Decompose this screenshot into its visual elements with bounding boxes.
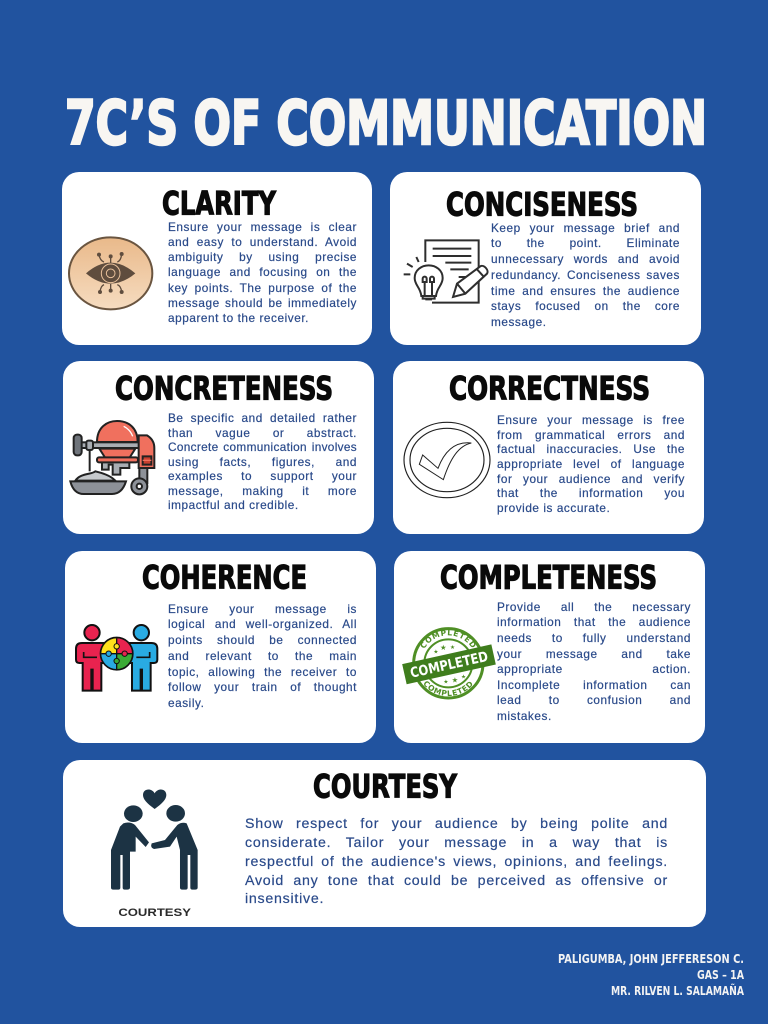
text: conciseness: Keep your message brief and [491,221,680,235]
icon: completed stamp: ★ [461,673,466,680]
text: concreteness: than vague or abstract. [168,426,357,440]
text: correctness [497,413,685,515]
text: clarity: and easy to understand. Avoid [168,235,357,249]
icon: two people shaking hands with heart: COURTESY [118,907,192,919]
text: concreteness: Concrete communication involves [168,440,357,454]
text: correctness: provide is accurate. [497,501,610,515]
text: clarity: key points. The purpose of the [168,281,357,295]
text: completeness: appropriate action. [497,662,691,676]
panel: clarity [62,172,372,345]
text: completeness: information that the audience [497,615,691,629]
text: courtesy: insensitive. [245,891,324,907]
panel: concreteness [63,361,374,534]
text: conciseness: message. [491,315,547,329]
icon: completed stamp [402,627,496,700]
icon: completed stamp: ★ [450,644,455,651]
panel: courtesy [63,760,706,927]
text: courtesy: Avoid any tone that could be perceived as offensive or [245,873,668,889]
icon: document, bulb and pencil [404,239,489,304]
panel: coherence [65,551,376,743]
icon: completed stamp: COMPLETED [424,681,472,696]
text: conciseness: redundancy. Conciseness saves [491,268,680,282]
text: correctness: Ensure your message is free [497,413,685,427]
panel: completeness [394,551,705,743]
text: completeness: lead to confusion and [497,693,691,707]
text: correctness: from grammatical errors and [497,428,685,442]
text: conciseness [491,221,680,329]
text: concreteness: examples to support your [168,469,357,483]
text: coherence: topic, allowing the receiver to [168,664,357,678]
icon: two people with puzzle [75,624,158,692]
icon: completed stamp: ★ [452,675,459,684]
text: concreteness: impactful and credible. [168,498,299,512]
text: coherence [168,602,357,710]
text: completeness: your message and take [497,647,691,661]
text: completeness: Provide all the necessary [497,600,691,614]
icon: completed stamp: COMPLETED [420,630,476,648]
heading: courtesy: COURTESY [313,768,458,806]
panel: correctness [393,361,704,534]
heading: completeness: COMPLETENESS [440,558,657,596]
heading: coherence: COHERENCE [142,558,307,596]
text: coherence: and relevant to the main [168,649,357,663]
footer credits [558,952,745,998]
heading: conciseness: CONCISENESS [446,186,638,224]
panel: conciseness [390,172,701,345]
text: clarity: language and focusing on the [168,265,357,279]
text: clarity: Ensure your message is clear [168,220,357,234]
text: completeness: Incomplete information can [497,678,691,692]
text: correctness: for your audience and verify [497,472,685,486]
footer credits: GAS – 1A [697,968,745,982]
text: conciseness: to the point. Eliminate [491,236,680,250]
text: conciseness: stays focused on the core [491,299,680,313]
text: courtesy: respectful of the audience's views, opinions, and feelings. [245,854,668,870]
icon: completed stamp: ★ [440,643,447,652]
text: clarity: message should be immediately [168,296,357,310]
text: courtesy: considerate. Tailor your message in a way that is [245,835,668,851]
icon: two people shaking hands with heart [111,790,198,919]
text: completeness [496,600,691,723]
icon: eye [68,236,154,310]
text: clarity: ambiguity by using precise [168,250,357,264]
icon: completed stamp: COMPLETED [409,649,490,682]
text: coherence: Ensure your message is [168,602,357,616]
text: clarity [168,220,357,325]
icon: concrete mixer [69,420,156,496]
text: coherence: follow your train of thought [168,680,357,694]
text: courtesy: Show respect for your audience by being polite and [245,816,668,832]
text: coherence: easily. [168,696,204,710]
text: completeness: needs to fully understand [497,631,691,645]
heading: concreteness: CONCRETENESS [115,370,333,408]
text: correctness: that the information you [497,486,685,500]
heading: correctness: CORRECTNESS [449,370,650,408]
text: concreteness: message, making it more [168,484,357,498]
text: conciseness: time and ensures the audience [491,284,680,298]
text: coherence: points should be connected [168,633,357,647]
icon: check mark circle [403,422,491,498]
text: concreteness [168,411,357,512]
heading: clarity: CLARITY [162,184,277,222]
text: concreteness: Be specific and detailed rather [168,411,357,425]
icon: completed stamp: ★ [443,678,448,685]
text: correctness: appropriate level of language [497,457,685,471]
icon: completed stamp: ★ [433,648,438,655]
text: coherence: logical and well-organized. All [168,617,357,631]
text: correctness: factual inaccuracies. Use the [497,442,685,456]
text: conciseness: unnecessary words and avoid [491,252,680,266]
text: clarity: apparent to the receiver. [168,311,309,325]
text: concreteness: using facts, figures, and [168,455,357,469]
text: completeness: mistakes. [497,709,552,723]
text: courtesy [244,816,668,907]
